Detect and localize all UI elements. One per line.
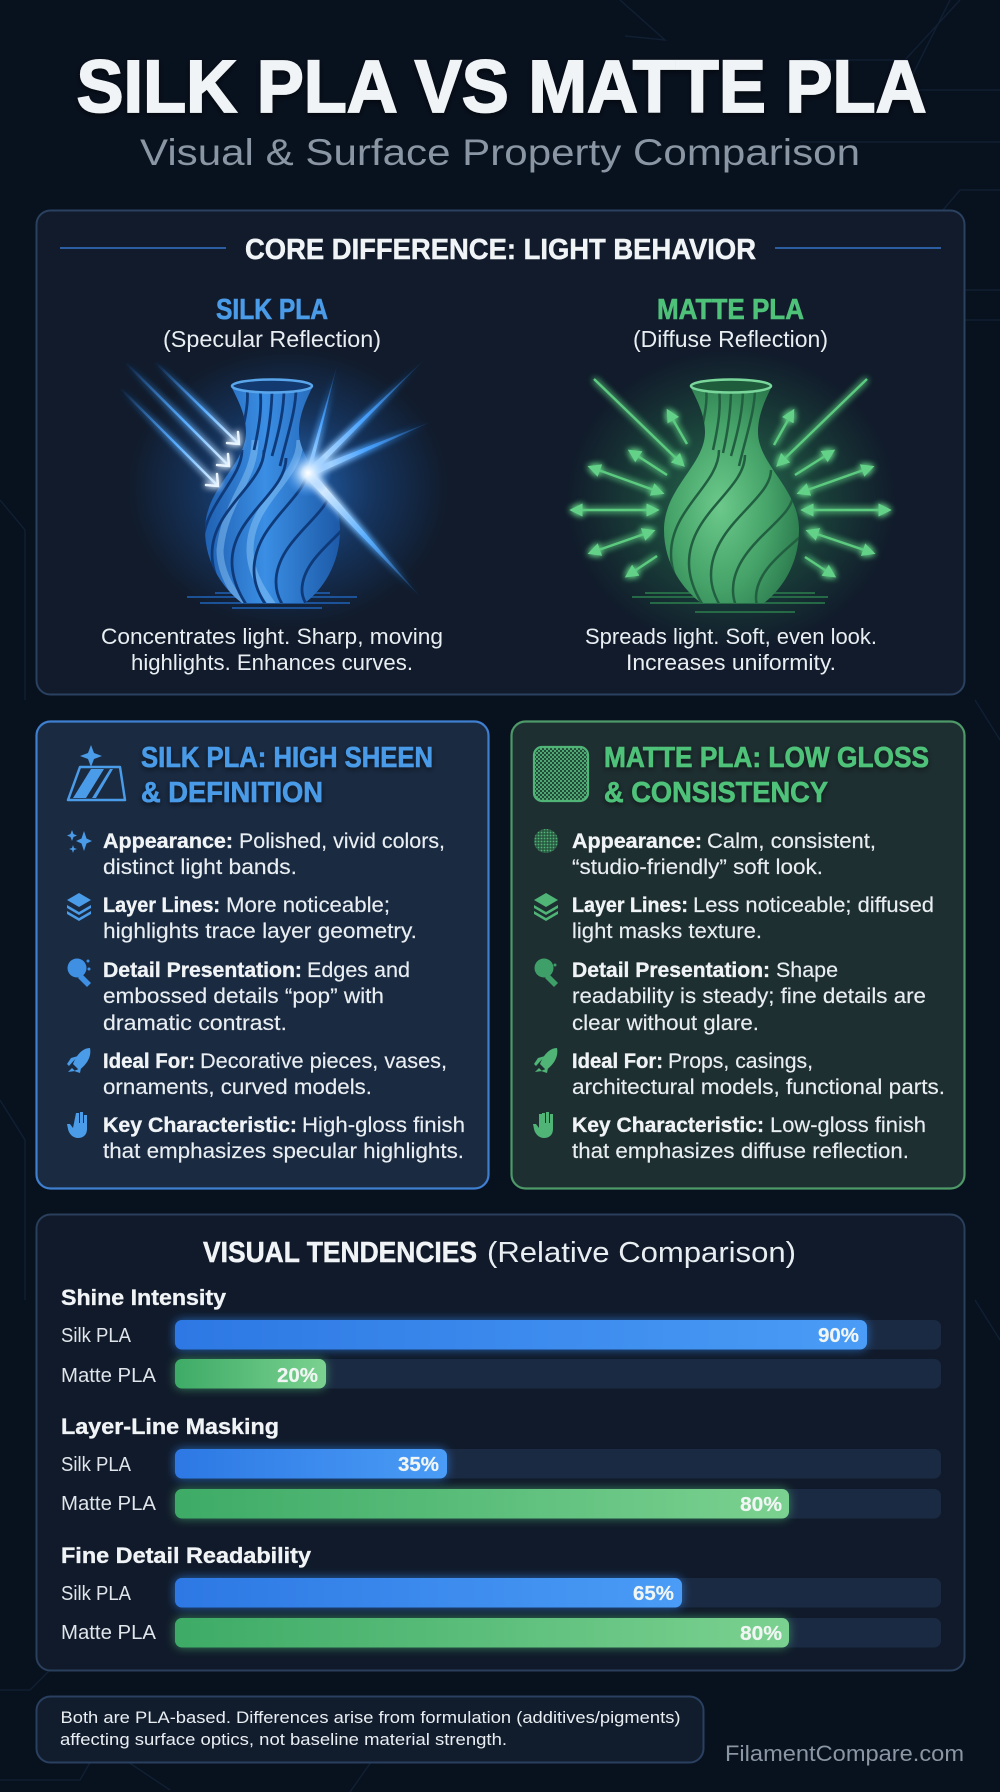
detail presentation row — [103, 958, 410, 1035]
silk bar 90 percent: Silk PLA — [61, 1324, 131, 1347]
reflected light rays — [304, 357, 435, 600]
ideal for row — [103, 1049, 447, 1099]
silk bar 35 percent: Silk PLA — [61, 1453, 131, 1476]
matte caption: Spreads light. Soft, even look. — [585, 624, 877, 649]
detail presentation row: dramatic contrast. — [103, 1011, 287, 1035]
key characteristic row: High-gloss finish — [302, 1113, 465, 1137]
icon: silk sheen — [68, 745, 125, 800]
detail presentation row: Detail Presentation: — [103, 958, 302, 982]
detail presentation row — [572, 958, 926, 1035]
icon: layers — [534, 893, 558, 921]
matte bar 80 percent: Matte PLA — [61, 1492, 156, 1515]
matte card background — [512, 722, 964, 1188]
matte bar 80 percent: 80% — [740, 1494, 782, 1516]
silk bar 35 percent: 35% — [398, 1454, 439, 1476]
panel: silk PLA properties — [36, 722, 488, 1188]
key characteristic row: Key Characteristic: — [572, 1113, 764, 1137]
key characteristic row: that emphasizes specular highlights. — [103, 1139, 464, 1163]
silk caption: Concentrates light. Sharp, moving — [101, 624, 443, 649]
icon: hand — [533, 1112, 553, 1138]
icon: matte texture — [534, 747, 588, 801]
key characteristic row: that emphasizes diffuse reflection. — [572, 1139, 909, 1163]
layer lines row — [572, 893, 934, 943]
matte vase illustration with diffuse arrows — [566, 366, 895, 634]
ideal for row: ornaments, curved models. — [103, 1075, 372, 1099]
matte vase body — [664, 378, 799, 603]
icon: layers — [67, 893, 91, 921]
subtitle: Visual & Surface Property Comparison — [140, 132, 860, 173]
title: SILK PLA VS MATTE PLA — [76, 45, 926, 128]
matte bar 20 percent: 20% — [277, 1365, 318, 1387]
appearance row: Appearance: — [572, 829, 702, 853]
group: fine detail readability: Fine Detail Readability — [61, 1543, 312, 1568]
panel: visual tendencies chart — [36, 1214, 964, 1670]
panel: matte PLA properties — [512, 722, 964, 1188]
matte bar 20 percent: Matte PLA — [61, 1364, 156, 1387]
silk column heading: SILK PLA — [216, 294, 328, 326]
matte column heading — [633, 294, 828, 352]
matte bar 80 percent — [61, 1489, 941, 1518]
icon: hand — [67, 1112, 87, 1138]
ideal for row: Ideal For: — [103, 1049, 195, 1073]
key characteristic row: Key Characteristic: — [103, 1113, 297, 1137]
ideal for row: Ideal For: — [572, 1049, 663, 1073]
diffuse arrows — [572, 379, 889, 576]
icon: detail magnifier — [534, 958, 558, 987]
layer lines row: More noticeable; — [226, 893, 390, 917]
layer lines row: light masks texture. — [572, 919, 762, 943]
group: layer-line masking — [61, 1414, 941, 1518]
silk bar 65 percent: Silk PLA — [61, 1582, 131, 1605]
group: shine intensity: Shine Intensity — [61, 1285, 227, 1310]
layer lines row: Less noticeable; diffused — [693, 893, 934, 917]
footnote panel — [36, 1696, 704, 1762]
layer lines row — [103, 893, 417, 943]
appearance row — [572, 829, 876, 879]
silk caption: highlights. Enhances curves. — [131, 650, 413, 675]
matte bar 20 percent — [61, 1359, 941, 1388]
panel heading: CORE DIFFERENCE: LIGHT BEHAVIOR — [245, 234, 756, 266]
matte column heading: MATTE PLA — [657, 294, 804, 326]
group: layer-line masking: Layer-Line Masking — [61, 1414, 279, 1439]
matte card heading: MATTE PLA: LOW GLOSS — [604, 742, 929, 774]
key characteristic row: Low-gloss finish — [770, 1113, 926, 1137]
silk column heading — [163, 294, 381, 352]
chart panel background — [36, 1214, 964, 1670]
ideal for row: Decorative pieces, vases, — [200, 1049, 447, 1073]
detail presentation row: Edges and — [307, 958, 410, 982]
detail presentation row: clear without glare. — [572, 1011, 759, 1035]
silk bar 65 percent — [61, 1578, 941, 1608]
silk card heading: SILK PLA: HIGH SHEEN — [141, 742, 433, 774]
detail presentation row: Detail Presentation: — [572, 958, 770, 982]
matte caption: Increases uniformity. — [626, 650, 836, 675]
group: shine intensity — [61, 1285, 941, 1388]
appearance row — [103, 829, 445, 879]
ideal for row: Props, casings, — [668, 1049, 813, 1073]
layer lines row: Layer Lines: — [572, 893, 688, 917]
chart heading: (Relative Comparison) — [487, 1237, 796, 1269]
silk card heading — [141, 742, 433, 809]
key characteristic row — [103, 1113, 465, 1163]
matte bar 80 percent: Matte PLA — [61, 1621, 156, 1644]
silk vase body — [205, 378, 340, 603]
icon: sparkles — [67, 830, 92, 853]
matte bar 80 percent — [61, 1618, 941, 1648]
detail presentation row: Shape — [776, 958, 838, 982]
footnote panel: affecting surface optics, not baseline material strength. — [60, 1730, 507, 1749]
silk card background — [36, 722, 488, 1188]
matte card heading: & CONSISTENCY — [604, 777, 828, 809]
appearance row: “studio-friendly” soft look. — [572, 855, 823, 879]
appearance row: Appearance: — [103, 829, 233, 853]
icon: detail magnifier — [68, 958, 91, 987]
matte column heading: (Diffuse Reflection) — [633, 326, 828, 352]
silk bar 35 percent — [61, 1449, 941, 1478]
appearance row: Polished, vivid colors, — [239, 829, 445, 853]
silk caption — [101, 624, 443, 675]
key characteristic row — [572, 1113, 926, 1163]
appearance row: Calm, consistent, — [707, 829, 876, 853]
ideal for row — [572, 1049, 945, 1099]
detail presentation row: readability is steady; fine details are — [572, 984, 926, 1008]
chart heading: VISUAL TENDENCIES — [203, 1237, 477, 1269]
silk bar 90 percent: 90% — [818, 1325, 859, 1347]
layer lines row: Layer Lines: — [103, 893, 220, 917]
silk card heading: & DEFINITION — [141, 777, 323, 809]
layer lines row: highlights trace layer geometry. — [103, 919, 417, 943]
silk bar 90 percent — [61, 1320, 941, 1350]
footnote panel: Both are PLA-based. Differences arise from formulation (additives/pigments) — [60, 1708, 680, 1727]
detail presentation row: embossed details “pop” with — [103, 984, 384, 1008]
panel: core difference — [36, 210, 964, 694]
silk bar 65 percent: 65% — [633, 1583, 674, 1605]
chart heading — [203, 1237, 796, 1269]
incoming light rays — [120, 362, 239, 486]
matte bar 80 percent: 80% — [740, 1623, 782, 1645]
matte caption — [585, 624, 877, 675]
ideal for row: architectural models, functional parts. — [572, 1075, 945, 1099]
appearance row: distinct light bands. — [103, 855, 297, 879]
icon: matte dot disc — [534, 829, 558, 853]
icon: rocket — [67, 1048, 90, 1073]
panel background — [36, 210, 964, 694]
matte card heading — [604, 742, 929, 809]
footer brand: FilamentCompare.com — [725, 1741, 964, 1766]
icon: rocket — [534, 1048, 557, 1073]
group: fine detail readability — [61, 1543, 941, 1648]
silk vase illustration with specular rays — [121, 359, 436, 618]
silk column heading: (Specular Reflection) — [163, 326, 381, 352]
